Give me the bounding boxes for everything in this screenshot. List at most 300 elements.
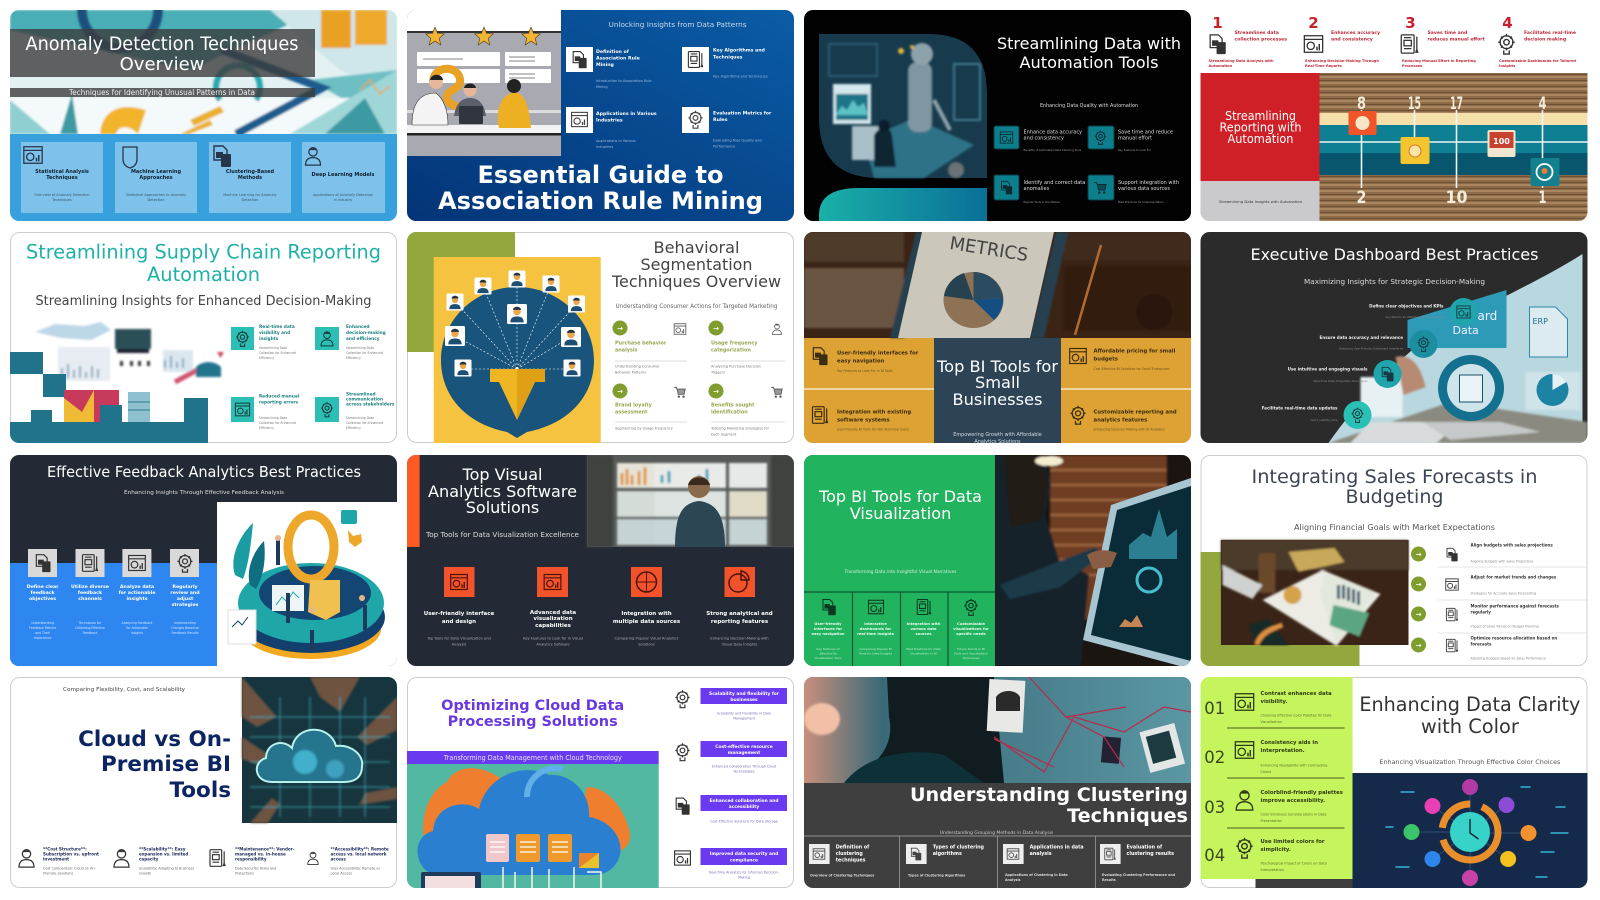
item: contrast [1204,691,1332,724]
card: deep learning [302,142,385,213]
item: colorblind: Colorblind-friendly palettes [1260,790,1343,796]
step 1: Streamlining Data Analysis with [1208,59,1274,63]
column: user-friendly: interfaces for [814,627,842,631]
step 3: Reducing Manual Effort in Reporting [1402,59,1476,63]
item: advanced: visualization [533,616,573,622]
title: Integrating Sales Forecasts in [1252,467,1538,488]
item: purchase behavior: analysis [615,348,638,354]
item: evaluation [682,107,772,148]
card: deep learning: Applications of Anomaly Detection [313,193,373,197]
card: machine learning: Machine Learning [131,169,181,175]
illustration: supply chain collage [10,322,224,443]
column: types [906,844,985,878]
item: anomalies [994,175,1085,204]
step: analyze [119,549,155,635]
item: maintenance: managed vs. in-house [235,852,286,856]
title: Cloud vs On- [78,727,231,752]
item: advanced: capabilities [535,623,572,629]
title: with Color [1421,715,1519,738]
panel: top bi tools small business [804,232,1191,445]
item: integration: Comparing Popular Visual Analytics [615,636,678,640]
item: reporting [706,567,773,646]
item: benefits sought: → [713,388,719,396]
column: dashboards: dashboards for [860,627,891,631]
step: analyze: Analyze data [120,584,154,590]
step: review: adjust [177,596,194,602]
title: Segmentation [640,255,752,274]
title: Premise BI [101,752,231,777]
photo: metrics report on wood [804,232,1191,338]
column: evaluation: clustering results [1126,851,1174,857]
item: visibility [231,324,296,360]
item: optimize: Optimize resource allocation based on [1470,636,1557,640]
step: review: Regularly [172,584,198,590]
timeline chart: 100 [1493,137,1510,146]
column: dashboards: Tools for Data Insights [858,652,893,656]
item: brand loyalty: Segmenting by Usage Frequency [615,426,673,430]
item: cost-effective: Enhanced Collaboration Through Cloud [712,764,776,768]
item: anomalies: Popular Tools in the Market [1024,200,1060,204]
step: analyze: Analyzing Feedback [122,621,153,625]
column: customizable: Techniques [962,656,980,660]
card: statistical analysis: Techniques [51,198,72,202]
item: advanced [523,567,583,646]
column: customizable: Tools and Visualization [953,652,988,656]
column: customizable: Customizable [957,622,985,626]
item: communication [315,392,395,430]
item: adjust: Strategies for Accurate Sales Forecasting [1470,592,1536,596]
subtitle: Understanding Consumer Actions for Targeted Marketing [616,304,778,310]
item: accuracy [994,126,1082,152]
item: objectives: Key Metrics for Effective Decision-Making [1386,315,1444,319]
item: usage frequency: Analyzing Purchase Decision [711,364,761,368]
column: integration: Integration with [907,622,941,626]
subtitle: Maximizing Insights for Strategic Decision-Making [1304,277,1485,286]
column: types: Types of Clustering Algorithms [908,874,965,878]
card: statistical analysis: Techniques [46,175,78,181]
title [818,487,982,523]
item: accessibility: **Accessibility**: Remote [330,846,389,852]
subtitle band [10,88,315,97]
item: security: Improved data security and [710,851,778,857]
step 2: Enhancing Decision-Making Through [1305,59,1379,63]
item: align budgets: Align budgets with sales projections [1470,542,1553,548]
item: accuracy [1319,330,1438,358]
card: statistical analysis: Overview of Anomaly Detection [34,193,90,197]
subtitle: Transforming Data into Insightful Visual Narratives [844,569,957,575]
title: Solutions [466,498,539,517]
subtitle: Comparing Flexibility, Cost, and Scalability [63,687,186,693]
column: dashboards [857,600,895,656]
item: colorblind: improve accessibility. [1260,798,1325,804]
item: purchase behavior [612,320,687,374]
card: clustering based: Machine Learning for Anomaly [223,193,277,197]
item: scalability: businesses [730,697,758,703]
item: usage frequency: → [713,324,719,332]
item: scalability: Growth [139,872,151,876]
title block: Automation [1228,131,1294,146]
step 3: 3 [1405,14,1416,32]
item: integration [812,407,911,432]
item: decision-making [315,324,386,360]
column: customizable: specific needs [956,632,987,636]
item: adjust [1411,574,1586,600]
item: limited colors [1204,828,1344,872]
item: cost-effective: management [728,750,760,756]
card: machine learning [115,142,197,213]
photo: dashboard and laptop: ERP [1532,317,1548,326]
item: communication: communication [346,396,383,402]
column: definition: Overview of Clustering Techniques [810,874,874,878]
step 1 [1208,14,1287,68]
column: evaluation: Results [1102,878,1116,882]
item: updates [1262,401,1372,429]
subtitle: Unlocking Insights from Data Patterns [608,21,747,29]
panel: cloud data processing [407,678,794,892]
item: decision-making: Enhanced [346,324,370,330]
item: maintenance: Protections [235,872,254,876]
subtitle: Top Tools for Data Visualization Excellence [425,531,579,539]
item: integration: various data sources [1118,186,1170,192]
item: visibility: Streamlining Data [259,346,287,350]
step 4 [1498,14,1576,68]
item: integration: multiple data sources [613,619,681,625]
step: analyze: for Actionable [126,626,148,630]
item: limited colors: Psychological Impact of Colors on Data [1260,862,1327,866]
title: Understanding Clustering [910,784,1188,806]
item: applications: Applications in Various [596,139,636,143]
step: review [170,549,200,635]
item: reporting errors: Streamlining Data [259,416,287,420]
item: accessibility [308,846,389,876]
dividers [804,388,1191,390]
column: user-friendly [812,600,845,660]
item: align budgets: → [1416,550,1422,558]
column: applications: Applications of Clustering in Data [1005,873,1068,877]
photo: report on desk [1221,540,1408,646]
item: decision-making: Efficiency [346,356,361,360]
column: applications: analysis [1030,851,1052,857]
column: dashboards: real-time insights [857,632,895,636]
item: security: compliance [730,858,758,864]
item: consistency [1204,728,1344,774]
subtitle band [407,751,659,764]
subtitle block: Streamlining Data Insights with Automation [1219,199,1303,204]
timeline chart: 2 [1356,188,1366,208]
column: user-friendly: easy navigation [812,632,845,636]
item: benefits sought: Each Segment [711,432,737,436]
step: define: Feedback Metrics [29,626,56,630]
item: accuracy: Enhance data accuracy [1024,130,1082,136]
item: integration: software systems [837,418,890,424]
item: consistency: 02 [1204,748,1225,767]
item: interface [424,567,494,646]
card: machine learning: Statistical Approaches to Anomaly [126,193,186,197]
step 3: reduces manual effort [1428,36,1486,42]
step 4: Insights [1499,64,1515,68]
item: scalability [114,846,194,876]
item: customizable: Customizable reporting and [1094,410,1177,416]
item: integration [613,567,681,646]
item: contrast: Visualization [1260,720,1282,724]
item: objectives [1369,298,1478,326]
item: cost-effective: Cost-effective resource [715,744,773,750]
subtitle: Enhancing Insights Through Effective Feedback Analysis [124,490,284,496]
center title block: Empowering Growth with Affordable [953,432,1042,438]
item: customizable: Enhancing Decision-Making with BI Analytics [1094,428,1165,432]
step: review: Changes Based on [171,626,199,630]
card: statistical analysis: Statistical Analysis [35,169,89,175]
title block: Reporting with [1220,120,1302,134]
card: machine learning: Detection [147,198,165,202]
item: security: Making [738,876,750,880]
item: save time: manual effort [1118,136,1152,142]
item: affordable [1070,348,1176,371]
item: interface: Analysis [452,642,467,646]
item: maintenance: Data Security: Risks and [235,866,276,870]
title: Techniques Overview [611,272,781,291]
item: benefits sought: Tailoring Marketing Strategies for [710,426,770,430]
item: optimize: → [1416,642,1422,650]
item: scalability: Scalability: Adapting to Business [139,866,194,870]
item: evaluation: Performance [713,144,735,148]
column: applications: Analysis [1005,878,1020,882]
title: Executive Dashboard Best Practices [1250,246,1538,264]
panel: visual analytics software [407,455,794,666]
item: communication: Streamlined [346,392,376,398]
item: key algorithms: Key Algorithms and Techniques [713,74,768,78]
title: Top Visual [461,465,542,484]
subtitle: Enhancing Data Quality with Automation [1040,103,1138,109]
timeline chart: 15 [1408,94,1421,114]
item: reporting errors [231,394,300,430]
timeline chart [1320,73,1588,221]
item: user-friendly [813,348,919,373]
item: evaluation: Rules [713,117,728,123]
item: evaluation: Evaluating Rule Quality and [713,138,762,142]
item: advanced: Analytics Software [536,642,570,646]
illustration: feedback platform [217,502,397,666]
center title block: Businesses [952,390,1042,409]
item: accuracy: and consistency [1024,136,1064,142]
item: monitor [1411,604,1586,633]
item: colorblind: Color Blindness Considerations in Data [1260,812,1326,816]
item: save time: Key Features to Look For [1118,148,1152,152]
column: evaluation: Evaluation of [1126,844,1163,850]
item: consistency: interpretation. [1260,748,1305,754]
item: anomalies: Identify and correct data [1024,180,1085,186]
column: customizable: Future Trends in BI [957,647,985,651]
item: integration [1088,175,1179,204]
item: reporting errors: reporting errors [259,400,299,406]
photo: man touching screen [995,455,1191,669]
title: Budgeting [1346,487,1444,508]
timeline chart: 1 [1538,188,1546,208]
step 4: Customizable Dashboards for Tailored [1499,59,1576,63]
item: maintenance: responsibility [235,856,267,862]
title: Enhancing Data Clarity [1359,693,1580,716]
item: collaboration: Cost-Effective Solutions for Data Storage [710,820,778,824]
item: cost structure: investment [43,856,69,862]
item: maintenance: **Maintenance**: Vendor- [235,846,295,852]
step 4: 4 [1502,14,1513,32]
panel: feedback analytics [10,455,397,666]
teal shape [819,188,987,221]
title [428,465,577,517]
item: purchase behavior: Understanding Consumer [615,364,660,368]
lime column [1200,677,1352,879]
step: channels: feedback [78,590,103,596]
column: definition: techniques [836,858,866,864]
step: review: review and [170,590,200,596]
card: clustering based: Detection [241,198,259,202]
column: types: algorithms [933,851,962,857]
item: collaboration [676,795,787,824]
photo: dashboard and laptop: Data [1452,324,1479,337]
card: machine learning: Approaches [139,175,173,181]
item: cost structure: Subscription vs. upfront [43,852,99,856]
item: applications: Industries [596,118,623,124]
main title [438,161,763,215]
item: decision-making: Collection for Enhanced [346,351,383,355]
item: interface: Top Tools for Data Visualization and [426,636,491,640]
title: Automation [147,263,260,286]
item: customizable: analytics features [1094,418,1147,424]
item: contrast: 01 [1204,699,1225,718]
item: integration: Support integration with [1118,180,1179,186]
column: user-friendly: Effective BI [820,652,837,656]
title [910,784,1188,827]
item: objectives: Define clear objectives and KPIs [1369,304,1444,308]
column: dashboards: Interactive [864,622,887,626]
column: user-friendly: Key Features of [816,647,841,651]
item: usage frequency [708,320,785,374]
item: monitor: Monitor performance against forecasts [1470,604,1559,608]
step: define [27,549,59,640]
item: benefits sought [708,384,785,436]
step 3: Processes [1402,64,1422,68]
item: decision-making: and efficiency [346,336,380,342]
item: usage frequency: Usage frequency [711,340,758,346]
title [441,698,624,730]
step 4: Facilitates real-time [1524,30,1576,36]
item: save time [1088,126,1173,152]
subtitle band: Transforming Data Management with Cloud Technology [443,754,622,762]
subtitle: Understanding Grouping Methods in Data Analysis [940,830,1054,836]
item: visuals: Real-Time Data Integration Techniques [1314,379,1368,383]
item: definition: Definition of [596,49,630,55]
item: updates: Insert_subtitle_here [1310,418,1338,422]
item: accuracy: Designing User-Friendly Dashboard Interfaces [1339,346,1404,350]
item: applications [566,107,657,149]
title: Processing Solutions [448,714,618,730]
item: security: Real-Time Analytics for Informed Decision- [709,870,780,874]
item: usage frequency: Triggers [710,370,725,374]
step 3 [1401,14,1486,68]
photo: hands around cloud [242,677,397,823]
title [1252,467,1538,508]
item: affordable: Affordable pricing for small [1094,348,1176,354]
item: cost structure: Cost Comparison: Cloud vs On- [43,866,97,870]
title: Effective Feedback Analytics Best Practices [47,463,361,481]
illustration: abstract data graphic [10,0,397,134]
column: customizable [953,599,989,660]
item: scalability: Scalability and Flexibility in Data [717,712,771,716]
item: updates: Facilitate real-time data updates [1262,406,1338,410]
subtitle band: Techniques for Identifying Unusual Patterns in Data [68,88,255,97]
item: adjust: → [1416,580,1422,588]
item: customizable [1070,406,1177,432]
item: definition: Introduction to Association Rule [596,79,652,83]
item: purchase behavior: Behavior Patterns [615,370,646,374]
olive block [1200,552,1360,666]
item: purchase behavior: Purchase behavior [615,340,667,346]
panel: executive dashboard [1200,232,1588,443]
step: channels: Utilize diverse [71,584,109,590]
title band: Anomaly Detection Techniques [26,34,298,55]
title [1359,693,1580,738]
main title: Association Rule Mining [438,187,763,215]
step 1: 1 [1212,14,1223,32]
panel: bi tools data visualization [804,455,1191,669]
item: reporting: Enhancing Decision-Making with [710,636,769,640]
item: reporting errors: Collection for Enhanced [259,421,296,425]
green panel [804,455,995,666]
column: definition: clustering [836,851,863,857]
title: Tools [169,778,231,803]
step: define: feedback [31,590,56,596]
subtitle: Aligning Financial Goals with Market Expectations [1294,523,1495,532]
item: cost structure: **Cost Structure**: [43,846,87,852]
step: review: strategies [172,602,199,608]
title: Analytics Software [428,482,577,501]
item: cost structure [19,846,99,876]
column dividers [804,836,1191,888]
column: integration [906,600,941,656]
item: interface: and design [442,619,476,625]
column: applications [1003,844,1084,882]
center title block: Small [975,373,1020,392]
timeline chart: 8 [1357,94,1366,114]
item: decision-making: decision-making [346,330,386,336]
item: decision-making: Streamlining Data [346,346,374,350]
item: consistency: Enhancing Readability with Contrasting [1260,764,1327,768]
column: integration: various data [910,627,937,631]
item: definition: Association Rule [596,56,640,62]
illustration: robot at desk [819,34,987,178]
step: define: Importance [34,636,52,640]
panel: data clarity with color [1200,677,1588,888]
title: Top BI Tools for Data [818,487,982,506]
item: visibility: Real-time data [259,324,295,330]
item: reporting: Strong analytical and [706,611,773,617]
item: scalability: expansion vs. limited [139,852,188,856]
panel: clustering techniques [804,677,1191,888]
center title block: Top BI Tools for [936,357,1058,376]
title: Behavioral [654,238,740,257]
item: monitor: Impact of Sales Trends on Budget Planning [1470,624,1539,628]
item: visibility: insights [259,336,279,342]
item: reporting: Visual Data Insights [722,642,757,646]
item: optimize: Adjusting Budgets Based on Sales Performance [1470,656,1546,660]
step: define: Understanding [31,621,54,625]
step: analyze: Insights [131,631,143,635]
item: accessibility: Local Access [330,872,352,876]
item: scalability: **Scalability**: Easy [139,846,186,852]
item: limited colors: 04 [1204,846,1225,865]
timeline chart: 17 [1450,94,1463,114]
item: cost-effective: Technologies [732,770,755,774]
